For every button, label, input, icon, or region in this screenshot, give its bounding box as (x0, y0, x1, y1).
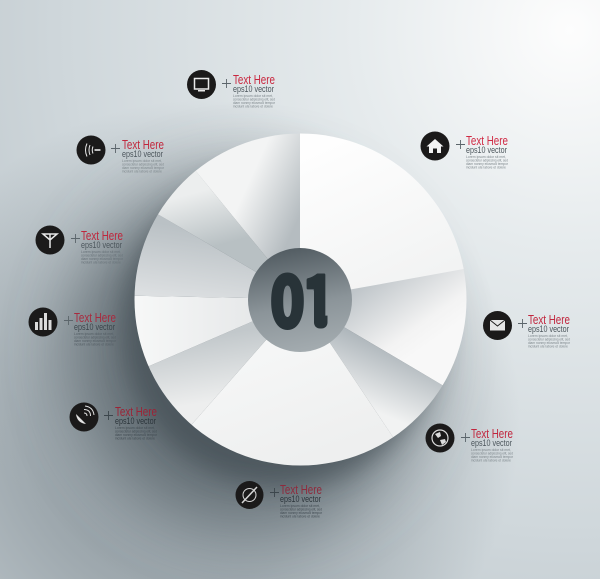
icon: envelope (483, 311, 512, 340)
callout: bars: diam nonmy eiusmod tempor (74, 339, 117, 343)
callout: tool: eps10 vector (280, 494, 321, 505)
number 01: 1 (302, 244, 334, 348)
callout: monitor: eps10 vector (233, 84, 274, 95)
callout: signal: Lorem ipsum dolor sit met, (122, 159, 162, 163)
segment: right fold (344, 270, 466, 386)
callout: satellite: Text Here (115, 405, 157, 419)
callout: mail: Lorem ipsum dolor sit met, (528, 334, 568, 338)
callout: home: consectetur adipiscing elit, sed (466, 158, 508, 162)
callout: globe: Lorem ipsum dolor sit met, (471, 448, 511, 452)
callout: satellite: Lorem ipsum dolor sit met, (115, 426, 155, 430)
segment: lower right fold (330, 328, 442, 438)
callout: signal (76, 136, 165, 174)
callout: antenna: eps10 vector (81, 240, 122, 251)
callout: signal: consectetur adipiscing elit, sed (122, 162, 164, 166)
callout: tool: diam nonmy eiusmod tempor (280, 511, 323, 515)
callout: antenna (36, 226, 124, 264)
callout: monitor: Text Here (233, 73, 275, 87)
icon: monitor (187, 70, 216, 99)
callout: monitor: incidunt ute labore et dolore (233, 104, 273, 108)
callout: monitor (187, 70, 276, 108)
callout: antenna: Lorem ipsum dolor sit met, (81, 250, 121, 254)
segment: left fold (134, 214, 256, 298)
icon: antenna (36, 226, 64, 254)
callout: tool: Lorem ipsum dolor sit met, (280, 504, 320, 508)
callout: monitor: Lorem ipsum dolor sit met, (233, 94, 273, 98)
segment: top left fold (196, 134, 300, 259)
callout: bars: incidunt ute labore et dolore (74, 342, 114, 346)
callout: home: Text Here (466, 134, 508, 148)
callout: monitor: consectetur adipiscing elit, sed (233, 98, 275, 102)
callout: tool: incidunt ute labore et dolore (280, 514, 320, 518)
callout: globe: eps10 vector (471, 438, 512, 449)
callout: antenna: consectetur adipiscing elit, sed (81, 254, 123, 258)
callout: antenna: Text Here (81, 229, 123, 243)
callout: home: incidunt ute labore et dolore (466, 166, 506, 170)
callout: mail: consectetur adipiscing elit, sed (528, 338, 570, 342)
icon: house (420, 132, 450, 160)
callout: mail: eps10 vector (528, 324, 569, 335)
callout: signal: Text Here (122, 138, 164, 152)
callout: bars: eps10 vector (74, 322, 115, 333)
callout: mail: Text Here (528, 313, 570, 327)
callout: tool (236, 481, 323, 518)
callout: home: eps10 vector (466, 145, 507, 156)
icon: sound waves (76, 136, 106, 164)
callout: home: diam nonmy eiusmod tempor (466, 162, 509, 166)
callout: satellite: eps10 vector (115, 416, 156, 427)
segment: lower left fold (148, 322, 266, 424)
callout: globe (426, 424, 514, 462)
callout: bars: Lorem ipsum dolor sit met, (74, 332, 114, 336)
number 01 (271, 272, 328, 330)
center hub (248, 248, 352, 352)
segment: top right white (300, 134, 464, 290)
callout: bars: Text Here (74, 311, 116, 325)
callout: antenna: diam nonmy eiusmod tempor (81, 257, 124, 261)
callout: mail (483, 311, 571, 348)
callout: satellite: diam nonmy eiusmod tempor (115, 433, 158, 437)
segment: upper left fold (158, 171, 268, 272)
callout: mail: diam nonmy eiusmod tempor (528, 341, 571, 345)
callout: signal: eps10 vector (122, 149, 163, 160)
callout: globe: Text Here (471, 427, 513, 441)
callout: home: Lorem ipsum dolor sit met, (466, 155, 506, 159)
callout: antenna: incidunt ute labore et dolore (81, 260, 121, 264)
callout: globe: consectetur adipiscing elit, sed (471, 452, 513, 456)
callout: globe: incidunt ute labore et dolore (471, 458, 511, 462)
callout: globe: diam nonmy eiusmod tempor (471, 455, 514, 459)
icon: crossed circle (236, 481, 264, 509)
icon: globe (426, 424, 454, 452)
paper pie chart (134, 134, 466, 466)
callout: bars: consectetur adipiscing elit, sed (74, 336, 116, 340)
segment: left white (134, 296, 253, 366)
callout: signal: diam nonmy eiusmod tempor (122, 166, 165, 170)
callout: monitor: diam nonmy eiusmod tempor (233, 101, 276, 105)
callout: bars (28, 308, 117, 346)
segment: bottom white (192, 340, 393, 466)
callout: home (420, 132, 509, 170)
callout: tool: Text Here (280, 483, 322, 497)
icon: satellite dish (70, 402, 98, 432)
callout: mail: incidunt ute labore et dolore (528, 344, 568, 348)
callout: satellite: consectetur adipiscing elit, sed (115, 430, 157, 434)
callout: satellite (70, 402, 158, 440)
icon: bar chart (28, 308, 58, 336)
number 01: 0 (270, 244, 305, 348)
callout: tool: consectetur adipiscing elit, sed (280, 508, 322, 512)
callout: satellite: incidunt ute labore et dolore (115, 436, 155, 440)
callout: signal: incidunt ute labore et dolore (122, 170, 162, 174)
